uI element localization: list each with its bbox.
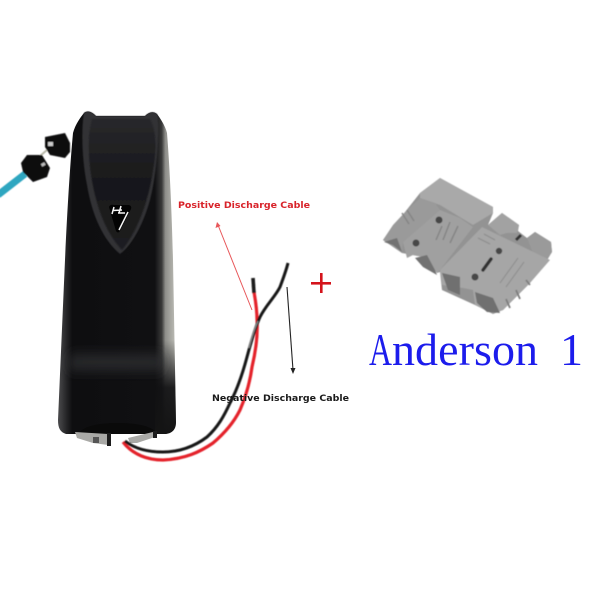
left sockets (384, 238, 402, 252)
cables (123, 263, 288, 460)
bottom clip right (128, 432, 155, 443)
Anderson connector (383, 178, 552, 314)
left barrel ribs (402, 210, 458, 243)
plus tab (488, 213, 519, 235)
right sockets (442, 273, 460, 295)
lower shading and sheen (68, 340, 180, 435)
top shield panel (89, 119, 155, 250)
right fins (506, 280, 530, 308)
mounting holes (436, 216, 442, 224)
back slot (516, 235, 521, 240)
bottom recess (78, 423, 158, 434)
arrow: negative (287, 287, 296, 374)
black negative cable (125, 263, 288, 452)
center slot (483, 259, 491, 270)
icon: keys on teal lanyard (0, 133, 70, 195)
battery body (58, 112, 176, 434)
connector silhouette (383, 178, 552, 314)
black positive tip (253, 278, 254, 293)
logo badge (109, 205, 131, 232)
product name: Anderson 1: nderson (392, 324, 538, 375)
cable silver glint (249, 321, 258, 348)
key upper (45, 133, 70, 158)
key lower (21, 155, 50, 182)
embossed marks (478, 234, 524, 287)
left barrel two (403, 210, 473, 273)
product name: Anderson 1: 1 (560, 324, 583, 375)
right top face (440, 227, 550, 313)
label: negative discharge cable: Negative Discharge Cable (212, 394, 349, 404)
teal lanyard (0, 174, 25, 195)
bottom clip left (75, 432, 108, 445)
left barrel one (383, 198, 440, 253)
left top plate (420, 178, 493, 225)
side tab (527, 232, 552, 267)
label: positive discharge cable: Positive Discharge Cable (178, 201, 310, 211)
product name: Anderson 1 (369, 324, 583, 375)
product name: Anderson 1: A (369, 324, 392, 375)
battery pack (58, 112, 180, 446)
red positive cable (123, 292, 257, 460)
infographic canvas (0, 110, 580, 462)
plus sign (311, 273, 331, 293)
arrow: positive (216, 222, 252, 310)
top bevel (82, 112, 158, 254)
